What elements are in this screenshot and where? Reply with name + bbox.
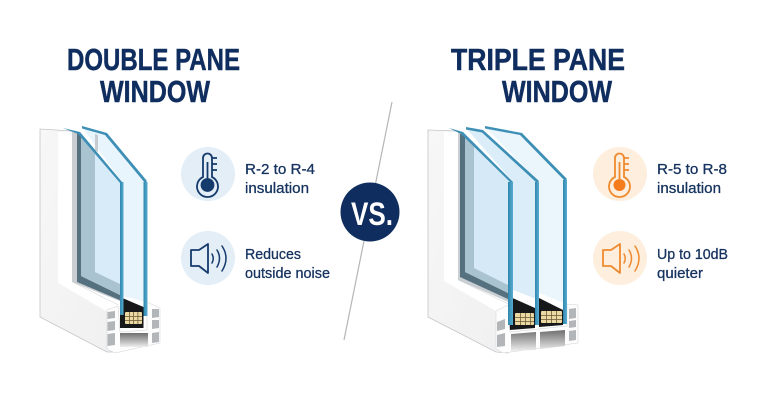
text: r-2 to r-4 insulation	[245, 161, 315, 197]
title: double pane window: WINDOW	[100, 74, 211, 109]
text: reduces outside noise: Reduces	[245, 246, 301, 263]
text: reduces outside noise	[245, 246, 330, 282]
text: up to 10db quieter: quieter	[657, 265, 703, 282]
text: r-2 to r-4 insulation: insulation	[245, 180, 309, 197]
vs badge	[340, 182, 400, 242]
title: triple pane window	[451, 42, 625, 109]
text: r-5 to r-8 insulation	[657, 161, 727, 197]
illustration: triple pane window section	[428, 126, 578, 353]
icon: double pane speaker	[181, 231, 235, 285]
title: triple pane window: WINDOW	[502, 74, 613, 109]
text: up to 10db quieter	[657, 246, 728, 282]
vs badge: VS.	[351, 196, 393, 232]
icon: triple pane thermometer	[593, 147, 647, 201]
icon: triple pane speaker	[593, 231, 647, 285]
text: reduces outside noise: outside noise	[245, 265, 330, 282]
text: up to 10db quieter: Up to 10dB	[657, 246, 728, 263]
text: r-5 to r-8 insulation: insulation	[657, 180, 721, 197]
text: r-5 to r-8 insulation: R-5 to R-8	[657, 161, 727, 178]
text: r-2 to r-4 insulation: R-2 to R-4	[245, 161, 315, 178]
illustration: double pane window section	[40, 126, 160, 353]
title: double pane window: DOUBLE PANE	[67, 42, 240, 77]
divider line	[344, 102, 392, 340]
title: double pane window	[67, 42, 240, 109]
title: triple pane window: TRIPLE PANE	[451, 42, 625, 77]
icon: double pane thermometer	[181, 147, 235, 201]
